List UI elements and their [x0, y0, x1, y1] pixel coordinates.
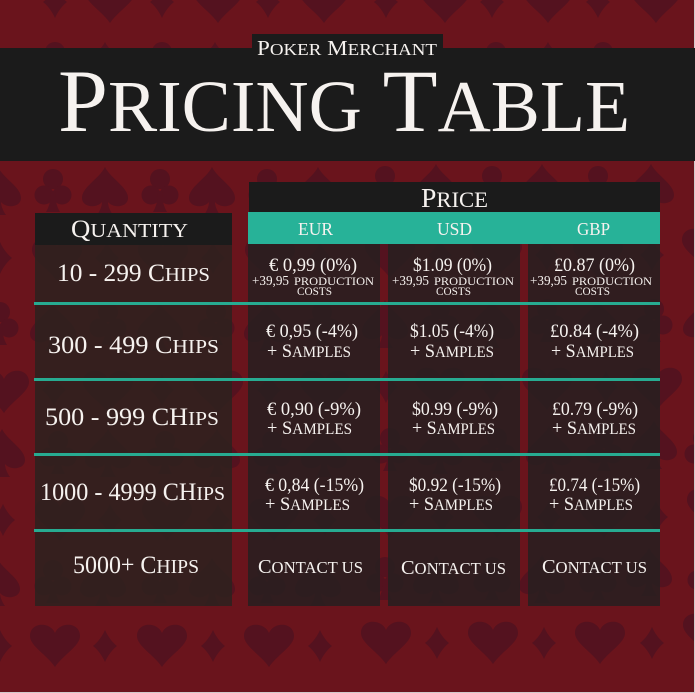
quantity tiers: 10 - 299 CHIPS [57, 260, 210, 287]
panel: GBP prices: COSTS [575, 284, 610, 298]
panel: EUR prices: € 0,99 (0%) [269, 255, 357, 276]
panel: USD prices: +39,95 [392, 274, 429, 289]
subtitle: POKER MERCHANT [257, 36, 438, 60]
quantity tiers: 5000+ CHIPS [73, 552, 199, 579]
panel: USD prices: + SAMPLES [410, 341, 494, 362]
panel: GBP prices: CONTACT US [542, 556, 647, 578]
currency labels: EUR [298, 219, 333, 239]
panel: GBP prices: £0.87 (0%) [554, 255, 635, 276]
panel: EUR prices: CONTACT US [258, 556, 363, 578]
panel: EUR prices: + SAMPLES [267, 418, 352, 439]
panel: EUR prices: PRODUCTION [294, 274, 374, 288]
title: PRICING TABLE [58, 53, 630, 151]
panel: USD prices: + SAMPLES [412, 418, 495, 439]
currency labels: GBP [577, 219, 610, 239]
panel: EUR prices: € 0,95 (-4%) [266, 321, 358, 342]
heading: quantity: QUANTITY [71, 216, 188, 243]
panel: GBP prices: + SAMPLES [551, 341, 634, 362]
currency labels [298, 219, 610, 239]
heading: price: PRICE [421, 183, 488, 213]
quantity tiers: 1000 - 4999 CHIPS [40, 479, 225, 506]
panel: GBP prices [528, 244, 660, 606]
panel: title banner [0, 34, 695, 161]
panel: price header [248, 182, 660, 244]
panel: GBP prices: £0.74 (-15%) [549, 475, 640, 496]
panel: EUR prices: COSTS [297, 284, 332, 298]
panel: USD prices: COSTS [436, 284, 471, 298]
panel: EUR prices: € 0,90 (-9%) [267, 399, 361, 420]
quantity tiers [40, 260, 225, 579]
quantity tiers: 300 - 499 C HIPS [48, 332, 219, 359]
panel: GBP prices: + SAMPLES [552, 418, 636, 439]
panel: GBP prices: +39,95 [530, 274, 567, 289]
panel: GBP prices: £0.79 (-9%) [552, 399, 638, 420]
panel: EUR prices: € 0,84 (-15%) [265, 475, 364, 496]
panel: GBP prices: PRODUCTION [572, 274, 652, 288]
panel: GBP prices: + SAMPLES [549, 494, 633, 515]
panel: EUR prices: + SAMPLES [265, 494, 350, 515]
panel: USD prices: $1.05 (-4%) [410, 321, 494, 342]
panel: quantity column [35, 213, 232, 606]
panel: USD prices: + SAMPLES [409, 494, 493, 515]
panel: USD prices: $0.99 (-9%) [412, 399, 498, 420]
panel: USD prices: $0.92 (-15%) [409, 475, 501, 496]
panel: USD prices: CONTACT US [401, 557, 506, 579]
currency labels: USD [437, 219, 472, 239]
panel: GBP prices: £0.84 (-4%) [550, 321, 639, 342]
heading: quantity [35, 213, 232, 245]
panel: EUR prices: +39,95 [252, 274, 289, 289]
panel: USD prices: $1.09 (0%) [413, 255, 492, 276]
panel: USD prices [388, 244, 520, 606]
panel: EUR prices [248, 244, 380, 606]
quantity tiers: 500 - 999 CH IPS [45, 404, 219, 431]
panel: EUR prices: + SAMPLES [267, 341, 351, 362]
panel: USD prices: PRODUCTION [434, 274, 514, 288]
